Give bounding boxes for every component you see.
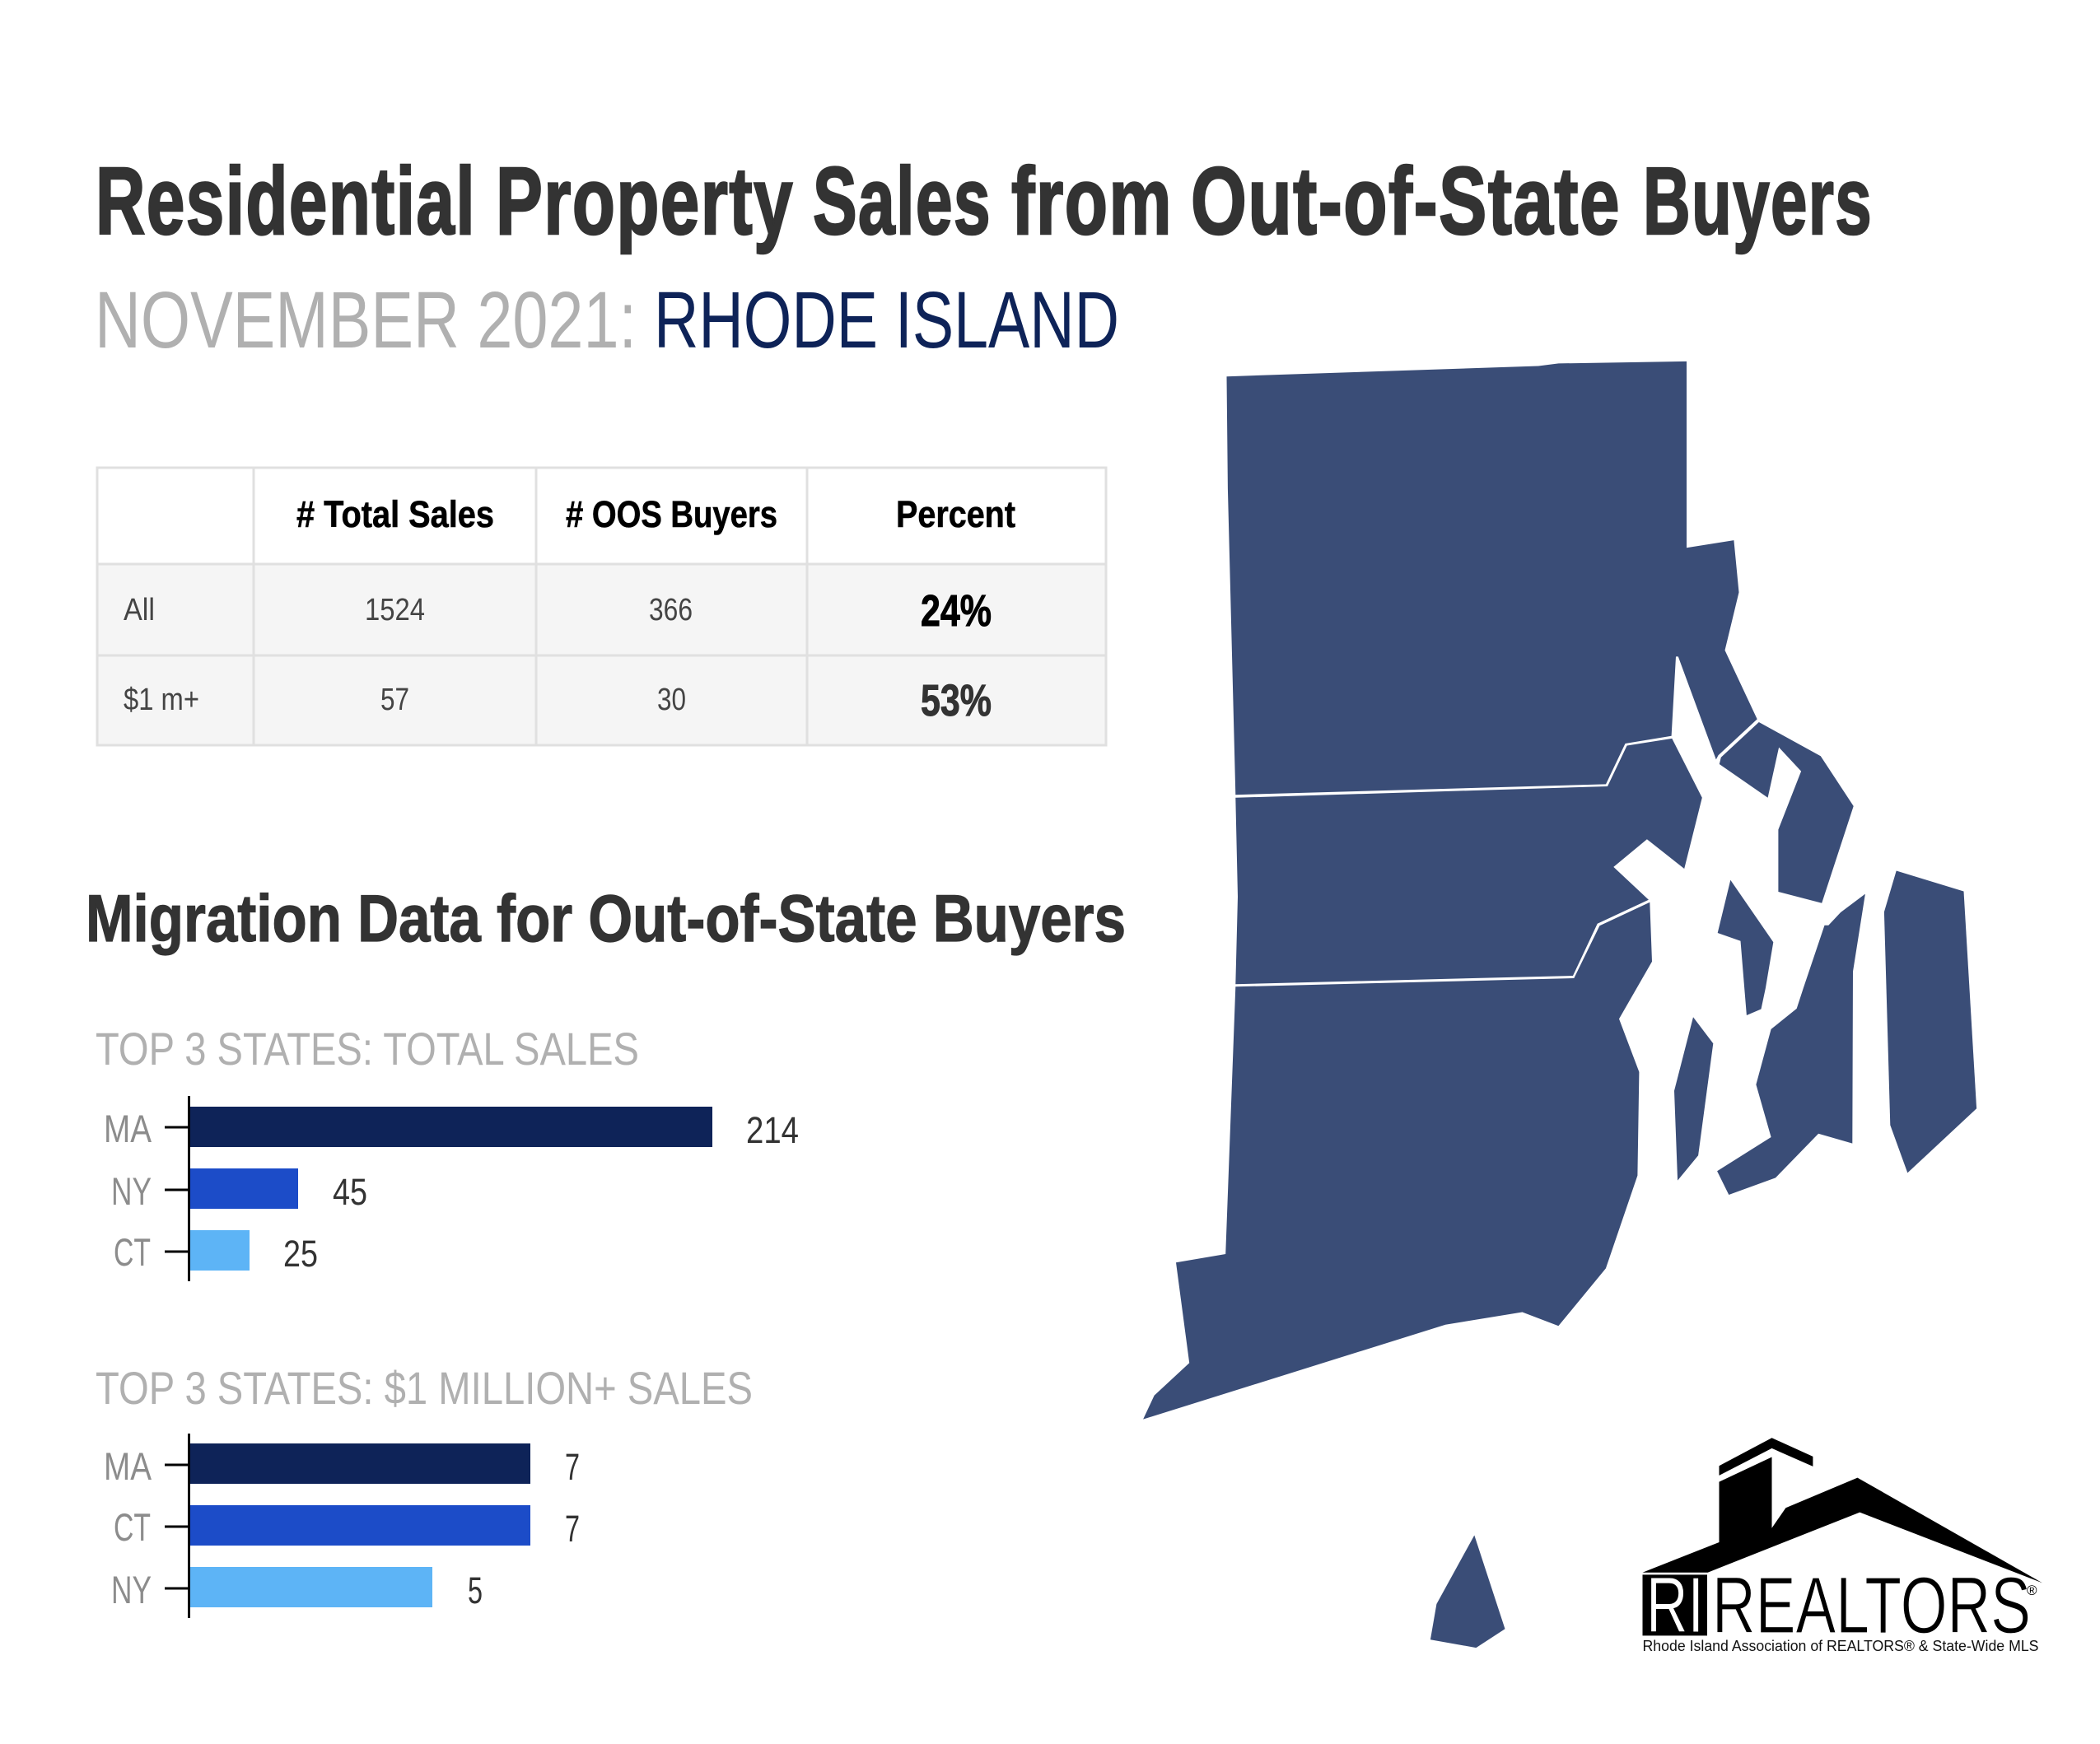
table row: $1 m+: 53% [921,676,992,725]
table row: $1 m+: $1 m+ [124,683,199,717]
logo tagline: Rhode Island Association of REALTORS® & State-Wide MLS [1642,1638,2039,1654]
table header row: Percent [896,493,1015,535]
title: from [1011,147,1173,254]
title: Sales [813,147,992,254]
title [96,147,1873,254]
icon: chimney cap [1720,1438,1813,1476]
title: Residential [96,147,476,254]
table row: all: All [124,593,155,627]
county: Bristol [1720,722,1854,903]
county: Newport east [1884,871,1976,1173]
title: Buyers [1643,147,1873,254]
subtitle: NOVEMBER 2021: [95,275,637,365]
bar chart: total sales: 214 [746,1109,799,1151]
table row: all: 1524 [365,593,425,627]
county: Kent [1235,739,1702,984]
table row: $1 m+: 57 [380,683,409,717]
bar chart: million-plus sales: NY [111,1568,152,1611]
bar chart: million-plus sales: CT [114,1505,151,1549]
bar chart: million-plus sales: 7 [565,1508,580,1550]
island: Conanicut [1674,1017,1713,1181]
bar chart: million-plus sales: MA [104,1444,152,1488]
title: Out-of-State [1191,147,1621,254]
bar chart: total sales: 45 [333,1171,367,1213]
icon: house roof [1642,1457,2042,1583]
subtitle [95,275,1119,365]
table row: $1 m+ [124,676,992,725]
table row: $1 m+: 30 [657,683,686,717]
logo registered mark: ® [2027,1583,2037,1598]
bar chart: million-plus sales [104,1434,580,1618]
island: Aquidneck [1717,894,1865,1195]
bar chart: million-plus sales: 5 [468,1569,483,1611]
table row: all: 24% [921,586,992,636]
bar chart: total sales: CT [114,1230,151,1274]
logo: RI Realtors [1642,1438,2042,1654]
table row: all: 366 [649,593,693,627]
chart heading: total sales: TOP 3 STATES: TOTAL SALES [96,1023,639,1075]
subtitle: RHODE ISLAND [654,275,1119,365]
island: Block Island [1430,1535,1505,1648]
table header row: # OOS Buyers [566,493,777,535]
title: Property [496,147,794,254]
chart heading: million-plus sales: TOP 3 STATES: $1 MILLION+ SALES [96,1362,753,1414]
bar chart: million-plus sales: 7 [565,1446,580,1488]
logo box: RI: RI [1646,1561,1704,1649]
migration heading: Migration Data for Out-of-State Buyers [86,882,1126,956]
table header row: # Total Sales [296,493,494,535]
bar chart: total sales: MA [104,1107,152,1150]
map of Rhode Island [1143,361,1976,1648]
bar chart: total sales: 25 [283,1233,318,1275]
table row: all [124,586,992,636]
bar chart: total sales: NY [111,1169,152,1213]
data table [96,468,1106,745]
island: Prudence [1718,880,1773,1015]
county: Providence [1227,361,1757,795]
table header row [296,493,1015,535]
county: Washington [1143,902,1652,1420]
bar chart: total sales [104,1096,799,1281]
